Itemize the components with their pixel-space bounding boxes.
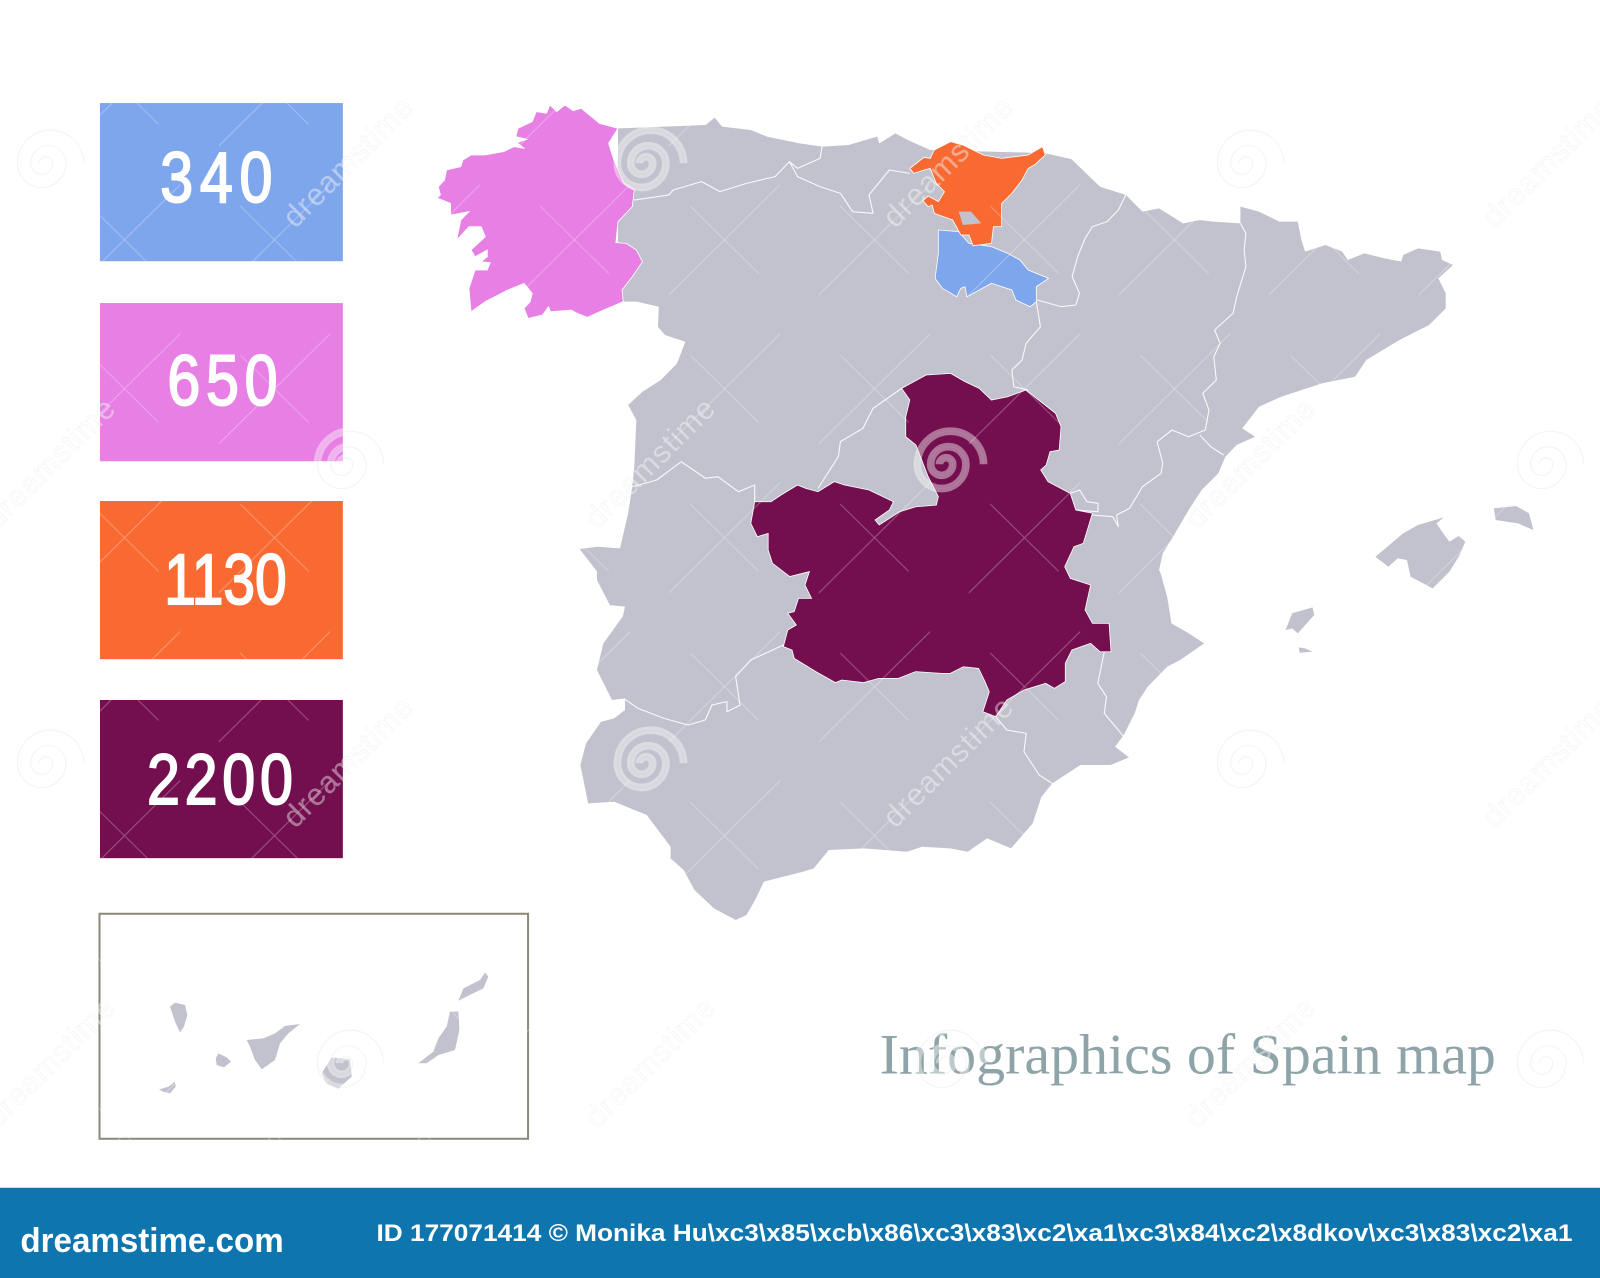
watermark overlay: dreamstime — [578, 990, 722, 1134]
island: Lanzarote — [458, 973, 488, 1001]
watermark overlay: dreamstime — [876, 90, 1020, 234]
footer logo: dreamstime.com — [20, 1222, 284, 1260]
box: 1130 — [100, 501, 343, 659]
box: 650 — [100, 303, 343, 461]
box: 340: 340 — [160, 138, 272, 217]
watermark overlay: dreamstime — [1178, 391, 1322, 535]
island: Tenerife — [247, 1024, 300, 1069]
legend: value boxes — [100, 103, 343, 858]
box: 1130: 1130 — [164, 540, 287, 619]
region: Basque Country — [910, 142, 1045, 246]
watermark overlay: dreamstime — [1178, 990, 1322, 1134]
region: Castilla-La Mancha — [751, 373, 1111, 717]
box: 340 — [100, 103, 343, 261]
island: La Gomera — [216, 1053, 231, 1067]
map of Spain — [437, 105, 1533, 920]
island: Mallorca — [1375, 517, 1465, 588]
inset: Canary Islands — [99, 914, 528, 1139]
box: 2200 — [100, 700, 343, 858]
region: La Rioja — [935, 230, 1049, 307]
watermark overlay: dreamstime — [876, 690, 1020, 834]
title: Infographics of Spain map — [880, 1023, 1496, 1086]
box: 2200: 2200 — [147, 740, 293, 819]
island: Gran Canaria — [322, 1057, 352, 1089]
island: Ibiza — [1286, 607, 1314, 633]
island: El Hierro — [159, 1082, 176, 1093]
island: La Palma — [170, 1003, 187, 1032]
island: Formentera — [1299, 647, 1313, 653]
watermark overlay: dreamstime — [578, 391, 722, 535]
island: Menorca — [1494, 506, 1533, 530]
region: mainland silhouette — [580, 118, 1453, 920]
island: Fuerteventura — [418, 1012, 459, 1063]
enclave inside Basque Country — [959, 212, 981, 225]
region: Galicia — [437, 105, 642, 318]
watermark overlay: dreamstime — [276, 690, 420, 834]
box: 650: 650 — [167, 341, 278, 420]
footer credit: ID 177071414 © Monika Hu\xc3\x85\xcb\x86\xc3\x83\xc2\xa1\xc3\x84\xc2\x8dkov\xc3\x83\xc2\xa1 — [377, 1220, 1572, 1247]
internal region borders — [625, 147, 1246, 783]
watermark overlay: dreamstime — [276, 90, 420, 234]
footer bar — [0, 1188, 1600, 1278]
